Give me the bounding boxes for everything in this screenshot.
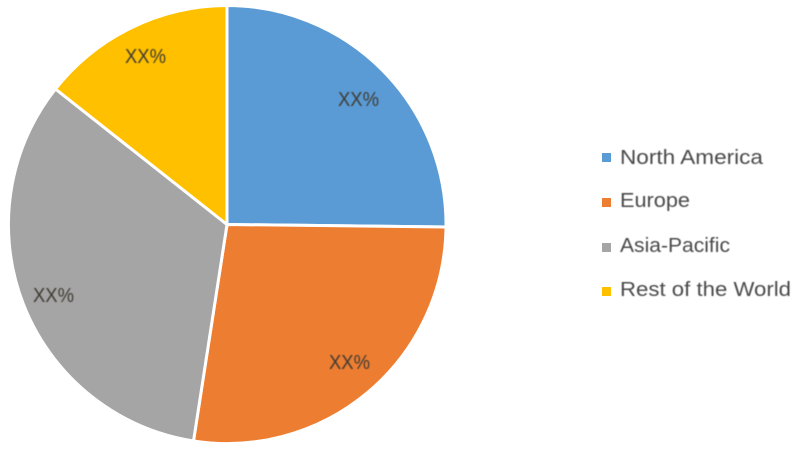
legend item: Rest of the World: Rest of the World [620,279,791,301]
slice: North America [227,5,446,227]
pie chart [8,5,446,444]
legend item: Asia-Pacific: Asia-Pacific [620,235,730,257]
slice: Rest of the World [56,6,227,224]
legend item: Europe: Europe [620,190,690,212]
label: North America value: XX% [338,89,379,111]
slice: Asia-Pacific [8,89,227,441]
legend [602,147,791,301]
label: Asia-Pacific value: XX% [33,285,74,307]
label: Europe value: XX% [329,352,370,374]
label: Rest of the World value: XX% [125,46,166,68]
slice: Europe [194,224,446,444]
legend item: North America: North America [620,147,764,169]
